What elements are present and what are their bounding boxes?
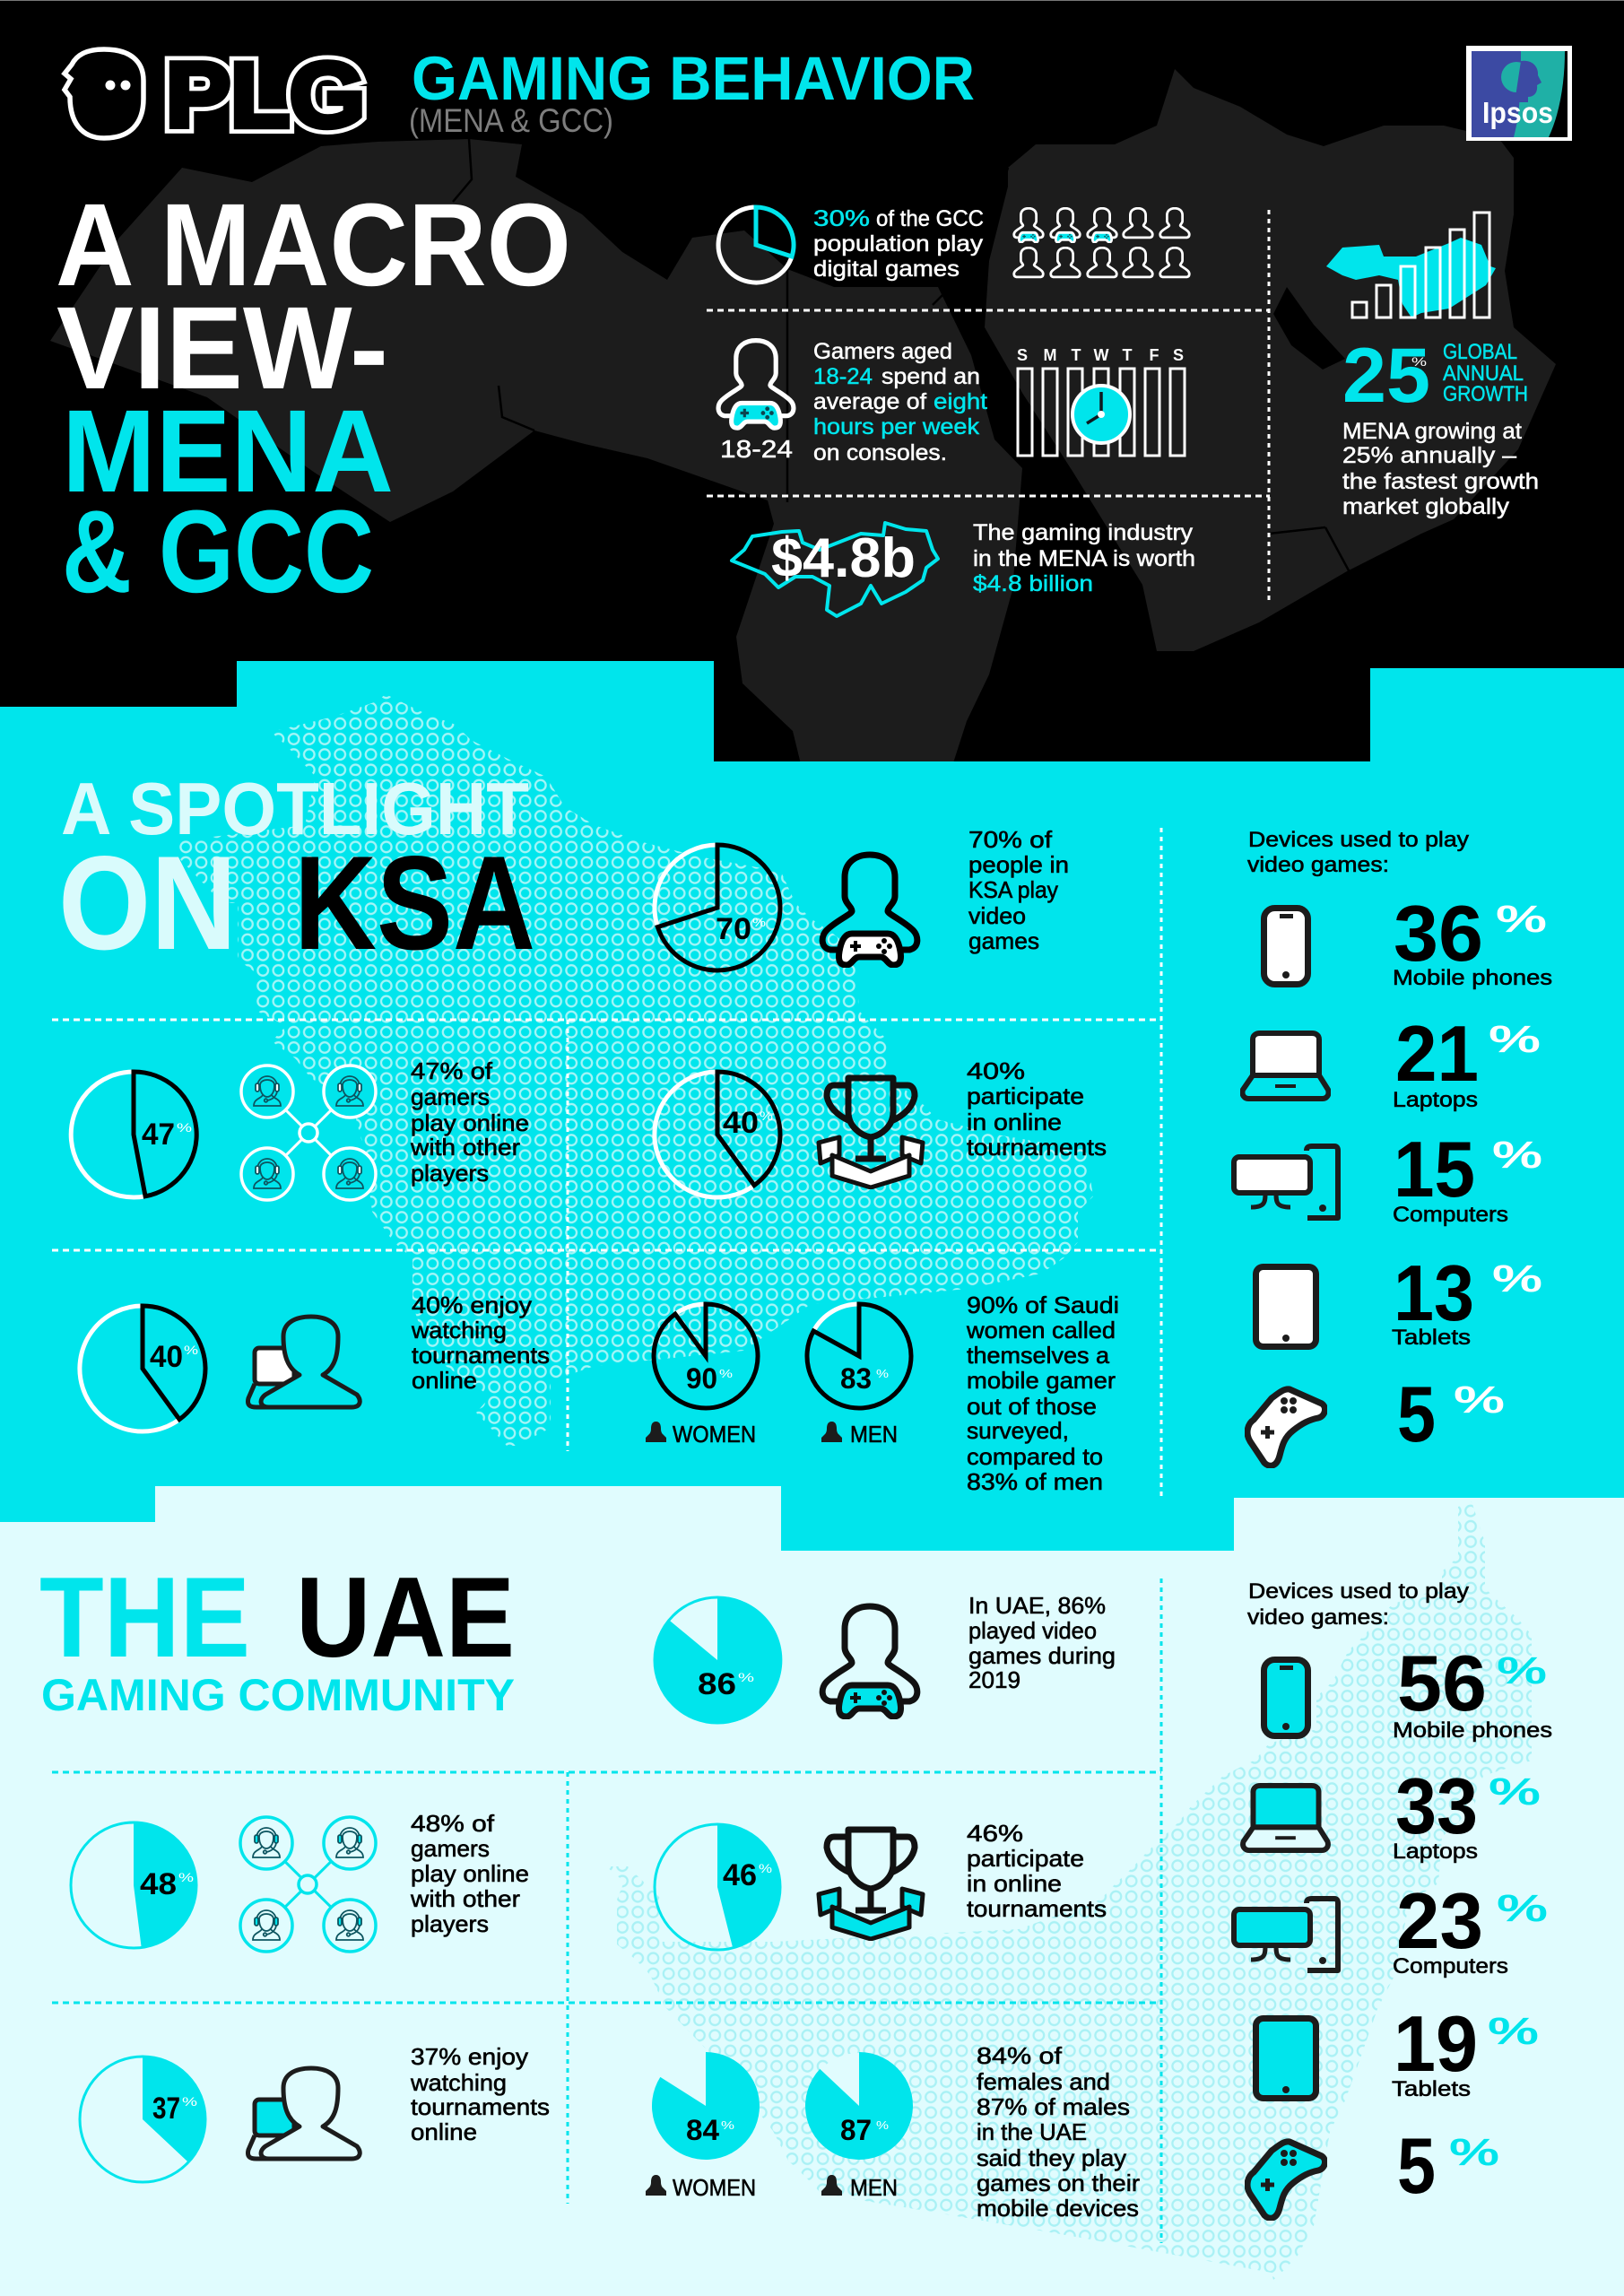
icon: mobile phone (1264, 1659, 1307, 1736)
icon: connected players (241, 1065, 376, 1200)
icon: computer (1234, 1899, 1338, 1970)
stat: 25 percent global annual growth: % (1411, 354, 1427, 369)
pie chart: women 90 percent: 90 (686, 1362, 717, 1395)
legend: men: MEN (850, 2174, 898, 2201)
text: gamers aged 18-24: 18-24 (813, 364, 873, 389)
text: 40 percent tournaments (967, 1057, 1107, 1161)
text: 47 percent online (410, 1057, 529, 1187)
text: 46 percent tournaments: 46% (967, 1820, 1023, 1847)
pie chart: 70 percent: 70 (716, 912, 751, 946)
legend: men: MEN (850, 1421, 898, 1448)
pie chart: 46 percent (655, 1823, 781, 1950)
text: 70 percent play (968, 826, 1069, 954)
text: devices heading: video games: (1247, 1605, 1389, 1630)
pie chart: 40 percent tournaments (655, 1072, 780, 1197)
stat: computers 15 percent: 15 (1394, 1125, 1475, 1213)
pie chart: 46 percent: % (759, 1861, 772, 1875)
text: gaming industry worth: in the MENA is worth (973, 546, 1195, 571)
logo: PLG mascot (65, 49, 143, 138)
stat: computers 23 percent (1393, 1876, 1548, 1979)
icon: viewer at screen (248, 2068, 360, 2159)
pie chart: 37 percent: % (182, 2094, 197, 2109)
stat: laptops 33 percent: 33 (1395, 1761, 1478, 1850)
text: 40 percent tournaments: participate (967, 1083, 1084, 1109)
heading: the UAE gaming community: GAMING COMMUNITY (41, 1670, 515, 1720)
stat: tablets 19 percent: 19 (1394, 1999, 1478, 2088)
text: 40 percent watching: watching (411, 1317, 507, 1344)
text: MENA growing: MENA growing at (1342, 419, 1522, 444)
pie chart: women 90 percent (654, 1304, 758, 1408)
subheading: MENA and GCC: (MENA & GCC) (409, 102, 613, 139)
text: 47 percent online: players (411, 1160, 489, 1187)
text: 70 percent play: 70% of (968, 826, 1053, 853)
icon: tablet (1255, 1266, 1316, 1347)
text: females and males mobile: in the UAE (977, 2118, 1087, 2145)
stat: 25 percent global annual growth: GLOBAL (1443, 340, 1517, 364)
text: 40 percent tournaments: 40% (967, 1057, 1025, 1084)
text: 40 percent tournaments: tournaments (967, 1134, 1107, 1161)
pie chart: 48 percent: % (178, 1870, 194, 1884)
pie chart: 48 percent: 48 (140, 1867, 177, 1901)
stat: tablets 19 percent: Tablets (1392, 2077, 1471, 2101)
text: 47 percent online: gamers (411, 1083, 490, 1110)
title: a macro view: & GCC (62, 485, 374, 617)
panel: UAE gaming community (39, 1553, 1552, 2243)
chart: growth bars over map (1326, 213, 1496, 317)
panel: UAE devices (1234, 1579, 1552, 2218)
text: Saudi women gamers: themselves a (967, 1342, 1110, 1369)
text: 47 percent online: with other (410, 1134, 520, 1161)
text: 47 percent online: play online (411, 1109, 529, 1136)
stat: mobile phones 36 percent (1393, 889, 1552, 990)
text: females and males mobile: 84% of (977, 2042, 1063, 2069)
heading: a spotlight on KSA: A SPOTLIGHT (61, 767, 529, 850)
stat: laptops 33 percent (1393, 1761, 1541, 1864)
stat: tablets 13 percent: % (1492, 1257, 1542, 1300)
dotted map of UAE (606, 1501, 1532, 2280)
pie chart: 40 percent tournaments: % (760, 1109, 773, 1123)
heading: gaming behavior: GAMING BEHAVIOR (412, 44, 975, 113)
legend: women: WOMEN (673, 2174, 756, 2201)
icon: trophy (819, 1078, 923, 1187)
text: 37 percent watching: 37% enjoy (411, 2043, 528, 2070)
text: 46 percent tournaments (967, 1820, 1107, 1922)
heading: a spotlight on KSA: ON (58, 828, 237, 978)
logo: Ipsos: Ipsos (1482, 96, 1553, 129)
pie chart: 37 percent (80, 2056, 205, 2182)
icon: tablet (1255, 2018, 1316, 2099)
text: Saudi women gamers: mobile gamer (967, 1367, 1116, 1394)
stat: 25 percent global annual growth: ANNUAL (1443, 361, 1524, 386)
icon: gamepad (1247, 2142, 1324, 2218)
stat: consoles 5 percent: 5 (1397, 1370, 1436, 1458)
title: a macro view (56, 178, 571, 617)
pie chart: 37 percent: 37 (152, 2092, 180, 2126)
text: Saudi women gamers: women called (966, 1317, 1116, 1344)
chart: week bars with clock (1017, 346, 1185, 456)
pie chart: men 87 percent: % (876, 2118, 890, 2132)
text: females and males mobile: games on their (977, 2170, 1140, 2196)
stat: 25 percent global annual growth (1342, 333, 1528, 419)
stat: mobile phones 36 percent: Mobile phones (1393, 966, 1552, 990)
dotted map of Saudi Arabia (178, 694, 1093, 1446)
pie chart: 40 percent watching (80, 1306, 205, 1431)
background map of MENA region (50, 69, 1556, 771)
stat: mobile phones 56 percent: 56 (1397, 1639, 1487, 1727)
title: a macro view: VIEW- (56, 282, 388, 413)
stat: computers 15 percent (1393, 1125, 1542, 1227)
text: 48 percent online: gamers (411, 1835, 490, 1862)
chart: week bars with clock: S (1017, 346, 1028, 364)
stat: consoles 5 percent: 5 (1397, 2121, 1436, 2210)
text: 30 percent of GCC: population play (813, 231, 984, 257)
text: 30 percent of GCC: 30% (813, 206, 870, 231)
text: 30 percent of GCC: of the GCC (876, 206, 984, 231)
text: 48 percent online: play online (411, 1860, 529, 1887)
pie chart: 40 percent watching: % (184, 1343, 198, 1357)
text: gamers aged 18-24 (813, 339, 987, 465)
stat: tablets 13 percent: Tablets (1392, 1326, 1471, 1350)
text: gaming industry worth (973, 520, 1195, 596)
stat: laptops 33 percent: % (1489, 1770, 1541, 1813)
icon: ten people, three gaming (1014, 208, 1189, 277)
pie chart: women 84 percent: % (721, 2118, 735, 2132)
icon: laptop (1242, 1033, 1329, 1099)
text: 86 percent played: In UAE, 86% (968, 1592, 1106, 1619)
stat: mobile phones 36 percent: % (1496, 898, 1547, 941)
text: 37 percent watching: watching (410, 2069, 507, 2096)
text: gamers aged 18-24: spend an (881, 364, 980, 389)
text: Saudi women gamers (966, 1292, 1119, 1495)
icon: viewer at screen (248, 1317, 360, 1407)
panel: black header background (0, 0, 1624, 771)
panel: macro view header (56, 44, 1572, 617)
stat: consoles 5 percent: % (1454, 1378, 1505, 1422)
text: 70 percent play: people in (968, 851, 1069, 878)
text: 46 percent tournaments: participate (967, 1845, 1084, 1872)
stat: 25 percent global annual growth: GROWTH (1443, 382, 1528, 406)
stat: laptops 21 percent: % (1489, 1018, 1541, 1061)
text: 40 percent watching: tournaments (412, 1342, 550, 1369)
logo: Ipsos (1466, 46, 1572, 141)
icon: mobile phone (1264, 908, 1307, 985)
text: gamers aged 18-24: on consoles. (813, 440, 947, 465)
stat: computers 15 percent: Computers (1393, 1203, 1508, 1227)
logo: PLG wordmark: PLG (166, 44, 365, 146)
stat: mobile phones 56 percent: Mobile phones (1393, 1718, 1552, 1743)
text: 48 percent online: 48% of (411, 1810, 495, 1837)
text: gamers aged 18-24: Gamers aged (813, 339, 952, 364)
pie chart: women 90 percent: % (719, 1367, 734, 1380)
text: females and males mobile: mobile devices (977, 2195, 1139, 2222)
stat: laptops 33 percent: Laptops (1393, 1839, 1478, 1864)
text: Saudi women gamers: 90% of Saudi (967, 1292, 1119, 1318)
text: 70 percent play: video (968, 902, 1026, 929)
pie chart: men 87 percent (805, 2052, 913, 2160)
panel: KSA devices (1234, 828, 1552, 1465)
icon: laptop (1243, 1786, 1328, 1850)
heading: a spotlight on KSA (58, 767, 535, 978)
title: a macro view: A MACRO (56, 178, 571, 310)
text: MENA growing (1342, 419, 1539, 519)
heading: a spotlight on KSA: KSA (294, 828, 535, 978)
chart: week bars with clock: T (1071, 346, 1081, 364)
pie chart: 40 percent tournaments: 40 (723, 1106, 759, 1140)
text: 37 percent watching: tournaments (411, 2093, 550, 2120)
title: a macro view: MENA (62, 385, 394, 517)
chart: week bars with clock: T (1123, 346, 1132, 364)
stat: consoles 5 percent (1397, 1370, 1505, 1458)
stat: computers 23 percent: % (1497, 1887, 1548, 1930)
pie chart: women 84 percent: 84 (686, 2114, 719, 2146)
chart: week bars with clock: S (1173, 346, 1184, 364)
chart: week bars with clock: W (1094, 346, 1108, 364)
text: gamers aged 18-24: hours per week (813, 414, 980, 439)
stat: mobile phones 56 percent: % (1497, 1649, 1547, 1692)
text: females and males mobile: females and (977, 2068, 1110, 2095)
pie chart: 86 percent (655, 1596, 782, 1724)
chart: week bars with clock: F (1150, 346, 1159, 364)
pie chart: 70 percent (655, 845, 780, 970)
icon: gamepad (1247, 1389, 1324, 1465)
pie chart: 47 percent: 47 (142, 1118, 175, 1152)
stat: laptops 21 percent: 21 (1395, 1009, 1479, 1098)
text: MENA growing: the fastest growth (1342, 469, 1539, 494)
text: 86 percent played (968, 1592, 1116, 1693)
text: Saudi women gamers: out of those (967, 1393, 1097, 1420)
panel: spotlight on KSA (52, 767, 1552, 1499)
pie chart: 48 percent (71, 1822, 197, 1948)
text: 48 percent online: with other (410, 1885, 520, 1912)
stat: tablets 19 percent: % (1488, 2010, 1539, 2053)
stat: tablets 13 percent (1392, 1248, 1542, 1350)
logo: PLG wordmark: PLG (166, 44, 365, 146)
icon: trophy (819, 1830, 923, 1939)
text: 40 percent watching (411, 1292, 550, 1394)
text: 40 percent watching: online (412, 1367, 477, 1394)
icon: gamer aged 18-24 (718, 341, 794, 463)
pie chart: 46 percent: 46 (723, 1858, 757, 1892)
text: 46 percent tournaments: tournaments (967, 1895, 1107, 1922)
text: females and males mobile (977, 2042, 1140, 2222)
pie chart: 30 percent (718, 207, 794, 283)
pie chart: men 83 percent: % (876, 1367, 890, 1380)
heading: the UAE gaming community: UAE (296, 1553, 515, 1681)
text: 86 percent played: played video (968, 1617, 1097, 1644)
legend: men (821, 1421, 898, 1448)
stat: computers 23 percent: 23 (1396, 1876, 1483, 1965)
text: 37 percent watching (410, 2043, 550, 2145)
pie chart: men 87 percent: 87 (840, 2114, 872, 2146)
pie chart: 47 percent (71, 1072, 196, 1197)
stat: computers 23 percent: Computers (1393, 1954, 1508, 1979)
stat: consoles 5 percent: % (1449, 2131, 1499, 2174)
text: females and males mobile: said they play (977, 2144, 1126, 2171)
text: 30 percent of GCC: digital games (813, 257, 960, 282)
icon: gamer (822, 1606, 917, 1717)
text: 47 percent online: 47% of (411, 1057, 493, 1084)
text: 70 percent play: games (968, 927, 1039, 954)
pie chart: 40 percent watching: 40 (150, 1340, 183, 1374)
text: 86 percent played: 2019 (968, 1666, 1020, 1693)
pie chart: 86 percent: % (738, 1670, 754, 1684)
text: gamers aged 18-24: eight (934, 389, 987, 414)
text: devices heading: Devices used to play (1248, 828, 1469, 852)
text: females and males mobile: 87% of males (977, 2093, 1130, 2120)
pie chart: men 83 percent: 83 (840, 1362, 872, 1395)
text: devices heading: video games: (1247, 853, 1389, 877)
pie chart: women 84 percent (652, 2052, 760, 2160)
stat: mobile phones 56 percent (1393, 1639, 1552, 1743)
text: devices heading: Devices used to play (1248, 1579, 1469, 1604)
text: MENA growing: market globally (1342, 494, 1510, 519)
icon: computer (1234, 1146, 1338, 1218)
stat: mobile phones 36 percent: 36 (1394, 889, 1483, 978)
panel: KSA cyan background (0, 661, 1624, 1561)
stat: 25 percent global annual growth: 25 (1342, 333, 1430, 419)
icon: connected players (240, 1817, 376, 1952)
heading: the UAE gaming community (39, 1553, 515, 1720)
text: MENA growing: 25% annually – (1342, 443, 1516, 468)
stat: laptops 21 percent: Laptops (1393, 1088, 1478, 1112)
legend: men (821, 2174, 898, 2201)
text: 86 percent played: games during (968, 1642, 1116, 1669)
stat: tablets 19 percent (1392, 1999, 1539, 2101)
text: 40 percent watching: 40% enjoy (412, 1292, 532, 1318)
stat: computers 15 percent: % (1492, 1134, 1542, 1177)
text: 70 percent play: KSA play (968, 876, 1058, 903)
icon: map with 4.8b value: $4.8b (771, 527, 916, 589)
stat: tablets 13 percent: 13 (1394, 1248, 1474, 1337)
text: devices heading (1247, 828, 1469, 877)
stat: laptops 21 percent (1393, 1009, 1541, 1112)
chart: week bars with clock: M (1044, 346, 1056, 364)
panel: UAE light background (0, 1486, 1624, 2296)
icon: gamer (822, 855, 917, 965)
text: 48 percent online: players (411, 1910, 489, 1937)
icon: gamer aged 18-24: 18-24 (720, 435, 793, 463)
text: gaming industry worth: $4.8 billion (973, 571, 1093, 596)
text: gamers aged 18-24: average of (813, 389, 926, 414)
legend: women: WOMEN (673, 1421, 756, 1448)
text: gaming industry worth: The gaming industry (973, 520, 1194, 545)
heading: the UAE gaming community: THE (39, 1553, 250, 1681)
text: 37 percent watching: online (411, 2118, 477, 2145)
pie chart: 47 percent: % (177, 1120, 192, 1135)
pie chart: men 83 percent (807, 1304, 911, 1408)
text: 30 percent of GCC (813, 206, 984, 282)
pie chart: 86 percent: 86 (698, 1667, 736, 1701)
text: Saudi women gamers: 83% of men (967, 1468, 1103, 1495)
icon: map with 4.8b value (732, 523, 938, 616)
text: 46 percent tournaments: in online (967, 1870, 1062, 1897)
stat: consoles 5 percent (1397, 2121, 1499, 2210)
text: Saudi women gamers: compared to (967, 1443, 1103, 1470)
pie chart: 70 percent: % (752, 915, 766, 929)
text: devices heading (1247, 1579, 1469, 1630)
text: 48 percent online (410, 1810, 529, 1937)
text: 40 percent tournaments: in online (967, 1109, 1062, 1135)
text: Saudi women gamers: surveyed, (967, 1417, 1069, 1444)
